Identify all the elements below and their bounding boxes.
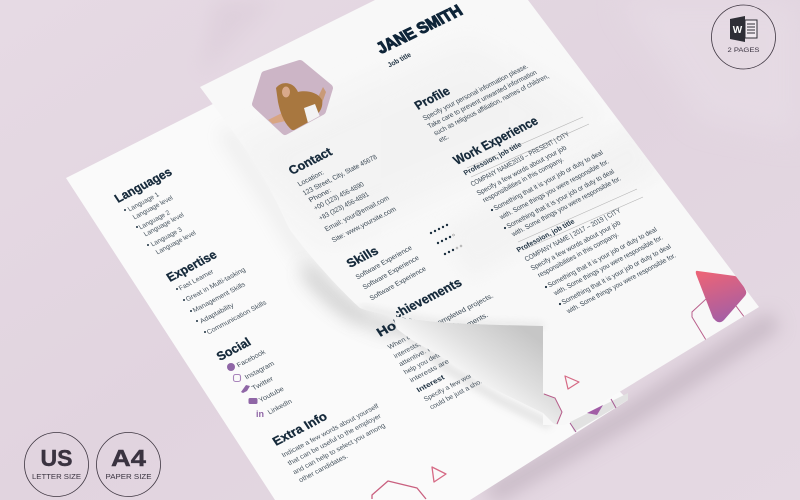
heading: Languages: Languages (112, 165, 175, 205)
text block: profile: Take care to prevent unwanted information (427, 69, 539, 130)
list: skills: Software Experience (355, 245, 414, 281)
skill rating dots (430, 224, 462, 255)
icon: outlined hexagon (372, 481, 426, 499)
panel: front resume page (200, 0, 759, 425)
divider rules (467, 117, 643, 250)
text block: contact details: Location: (297, 170, 326, 188)
text block: profile: etc. (438, 134, 451, 144)
icon: youtube (248, 398, 258, 404)
text block: hobbies: could be just a short (429, 377, 486, 411)
text block: extra info: Indicate a few words about yourself (281, 403, 380, 459)
text block: contact details (297, 154, 398, 244)
list: languages (124, 191, 198, 256)
job entry 1: COMPANY NAME2019 – PRESENT | CITY (470, 131, 571, 188)
job entry 1: Something that it is your job or duty to deal (506, 168, 616, 230)
job entry 1 (462, 131, 623, 239)
list: skills: Software Experience (362, 255, 421, 291)
badge: US letter size: US (40, 445, 72, 471)
list: languages: Language level (143, 212, 186, 238)
icon: Word document: W (733, 25, 743, 36)
icon: outlined hexagon corner decoration (692, 299, 745, 340)
job entry 1: Specify a few words about your job (476, 145, 568, 197)
text block: hobbies: Specify a few words (423, 369, 480, 403)
text block: hobbies: When do you have free time (387, 303, 470, 351)
badge: A4 paper size: A4 (111, 445, 146, 471)
badge: A4 paper size: PAPER SIZE (106, 474, 152, 481)
text block: contact details: +83 (323) 456-4891 (318, 191, 371, 222)
text block: extra info: and can help to select you among (292, 422, 387, 476)
panel: curled page flap (393, 316, 562, 425)
panel: back resume page (66, 60, 628, 500)
text block: hobbies: interests, hobbies and things (393, 312, 477, 360)
heading: Contact: Contact (286, 145, 335, 177)
text block: contact details: 123 Street, City, State 45678 (302, 154, 379, 197)
job entry 2: Something that it is your job or duty to deal (547, 226, 659, 289)
list: languages: Language 1 (127, 191, 161, 213)
list: social links: Youtube (258, 386, 286, 404)
job entry 2: with. Some things you were responsible for. (565, 253, 678, 316)
heading: Work Experience: Work Experience (450, 113, 541, 167)
icon: small outlined triangle (565, 376, 579, 389)
list: languages: Language 2 (138, 209, 172, 231)
title: Jane Smith: JANE SMITH (373, 2, 466, 57)
job entry 2: Something that it is your job or duty to deal (561, 243, 673, 306)
text block: contact details: Email: your@email.com (324, 195, 391, 233)
text block: achievements: List your completed projects. (406, 293, 495, 342)
text block: hobbies (387, 303, 492, 411)
list: languages: Language level (155, 230, 198, 256)
text block: achievements (438, 295, 494, 324)
heading: Skills: Skills (344, 244, 381, 270)
list: languages: Language level (132, 195, 175, 221)
text block: extra info: that can be useful to the employer (287, 413, 383, 467)
badge: Word 2 pages (712, 5, 776, 69)
list: expertise: Adaptability (199, 302, 236, 325)
text block: contact details: Site: www.yoursite.com (331, 206, 398, 244)
job entry 2: responsibilities in this company. (537, 231, 620, 279)
text block: hobbies: Interest (415, 373, 447, 394)
list: expertise (176, 267, 269, 336)
list: expertise: Fast Learner (178, 268, 216, 292)
badge: US letter size: LETTER SIZE (32, 474, 81, 481)
text block: contact details: +00 (123) 456-4890 (313, 181, 366, 212)
job entry 1: Profession, job title (462, 140, 523, 177)
heading: Extra Info: Extra Info (270, 409, 330, 448)
badge: A4 paper size (96, 432, 160, 496)
icon: linkedin: in (256, 409, 264, 419)
text block: hobbies: help you determine what your (403, 328, 487, 376)
heading: Social: Social (214, 335, 254, 363)
list: social links: Instagram (244, 360, 276, 381)
badge: US letter size (24, 432, 88, 496)
icon: instagram (234, 374, 240, 382)
list: expertise: Management Skills (192, 281, 247, 314)
strip of back page seen below front page (570, 393, 628, 432)
subtitle: job title: Job title (386, 50, 413, 69)
text block: extra info (281, 403, 387, 484)
job entry 1: with. Some things you were responsible for. (498, 159, 611, 222)
heading: Expertise: Expertise (164, 248, 219, 284)
text block: profile: Specify your personal information please. (422, 63, 530, 122)
list: skills: Software Experience (369, 266, 428, 302)
job entry 1: responsibilities in this company. (482, 156, 565, 204)
list: social links: Facebook (236, 349, 268, 369)
list: languages: Language 3 (150, 226, 184, 248)
job entry 1: with. Some things you were responsible for. (510, 176, 623, 239)
list: expertise: Great in Multi-tasking (185, 267, 247, 303)
text block: achievements: and your achievements. (415, 312, 490, 354)
fold shadow on back page (225, 130, 550, 425)
list: social links: LinkedIn (267, 398, 294, 416)
heading: Achievements: Achievements (381, 275, 465, 325)
job entry 2: COMPANY NAME | 2017 – 2019 | CITY (524, 207, 623, 263)
list: expertise: Communication Skills (206, 299, 269, 336)
icon: twitter (241, 385, 250, 393)
shadow of pages on surface (490, 320, 775, 495)
list: social links (227, 349, 294, 419)
text block: extra info: other candidates. (298, 453, 350, 484)
text block: hobbies: interests are and could be (409, 336, 492, 384)
flap hexagon outline (544, 394, 562, 424)
text block: hobbies: attentive. Hobbies may also (398, 320, 481, 368)
text block: profile: such as religious affiliation, names of children, (433, 73, 551, 137)
icon: facebook (227, 363, 235, 371)
icon: hexagon profile photo (256, 64, 329, 131)
job entry 2 (515, 207, 678, 316)
list: skills (356, 246, 426, 300)
job entry 1: Something that it is your job or duty to deal (493, 149, 605, 212)
icon: gradient triangle (696, 271, 746, 322)
soft window shadows on page (230, 40, 600, 240)
badge: Word 2 pages: 2 PAGES (728, 47, 760, 54)
job entry 2: Profession, job title (515, 217, 576, 254)
heading: Profile: Profile (412, 84, 453, 112)
back page decoration (570, 399, 616, 432)
job entry 2: with. Some things you were responsible for. (552, 235, 665, 298)
job entry 2: Specify a few words about your job (530, 220, 622, 272)
text block: contact details: Phone: (308, 187, 333, 204)
heading: Hobbies: Hobbies (374, 301, 433, 339)
icon: outlined triangle (432, 467, 446, 482)
list: social links: Twitter (251, 375, 276, 392)
